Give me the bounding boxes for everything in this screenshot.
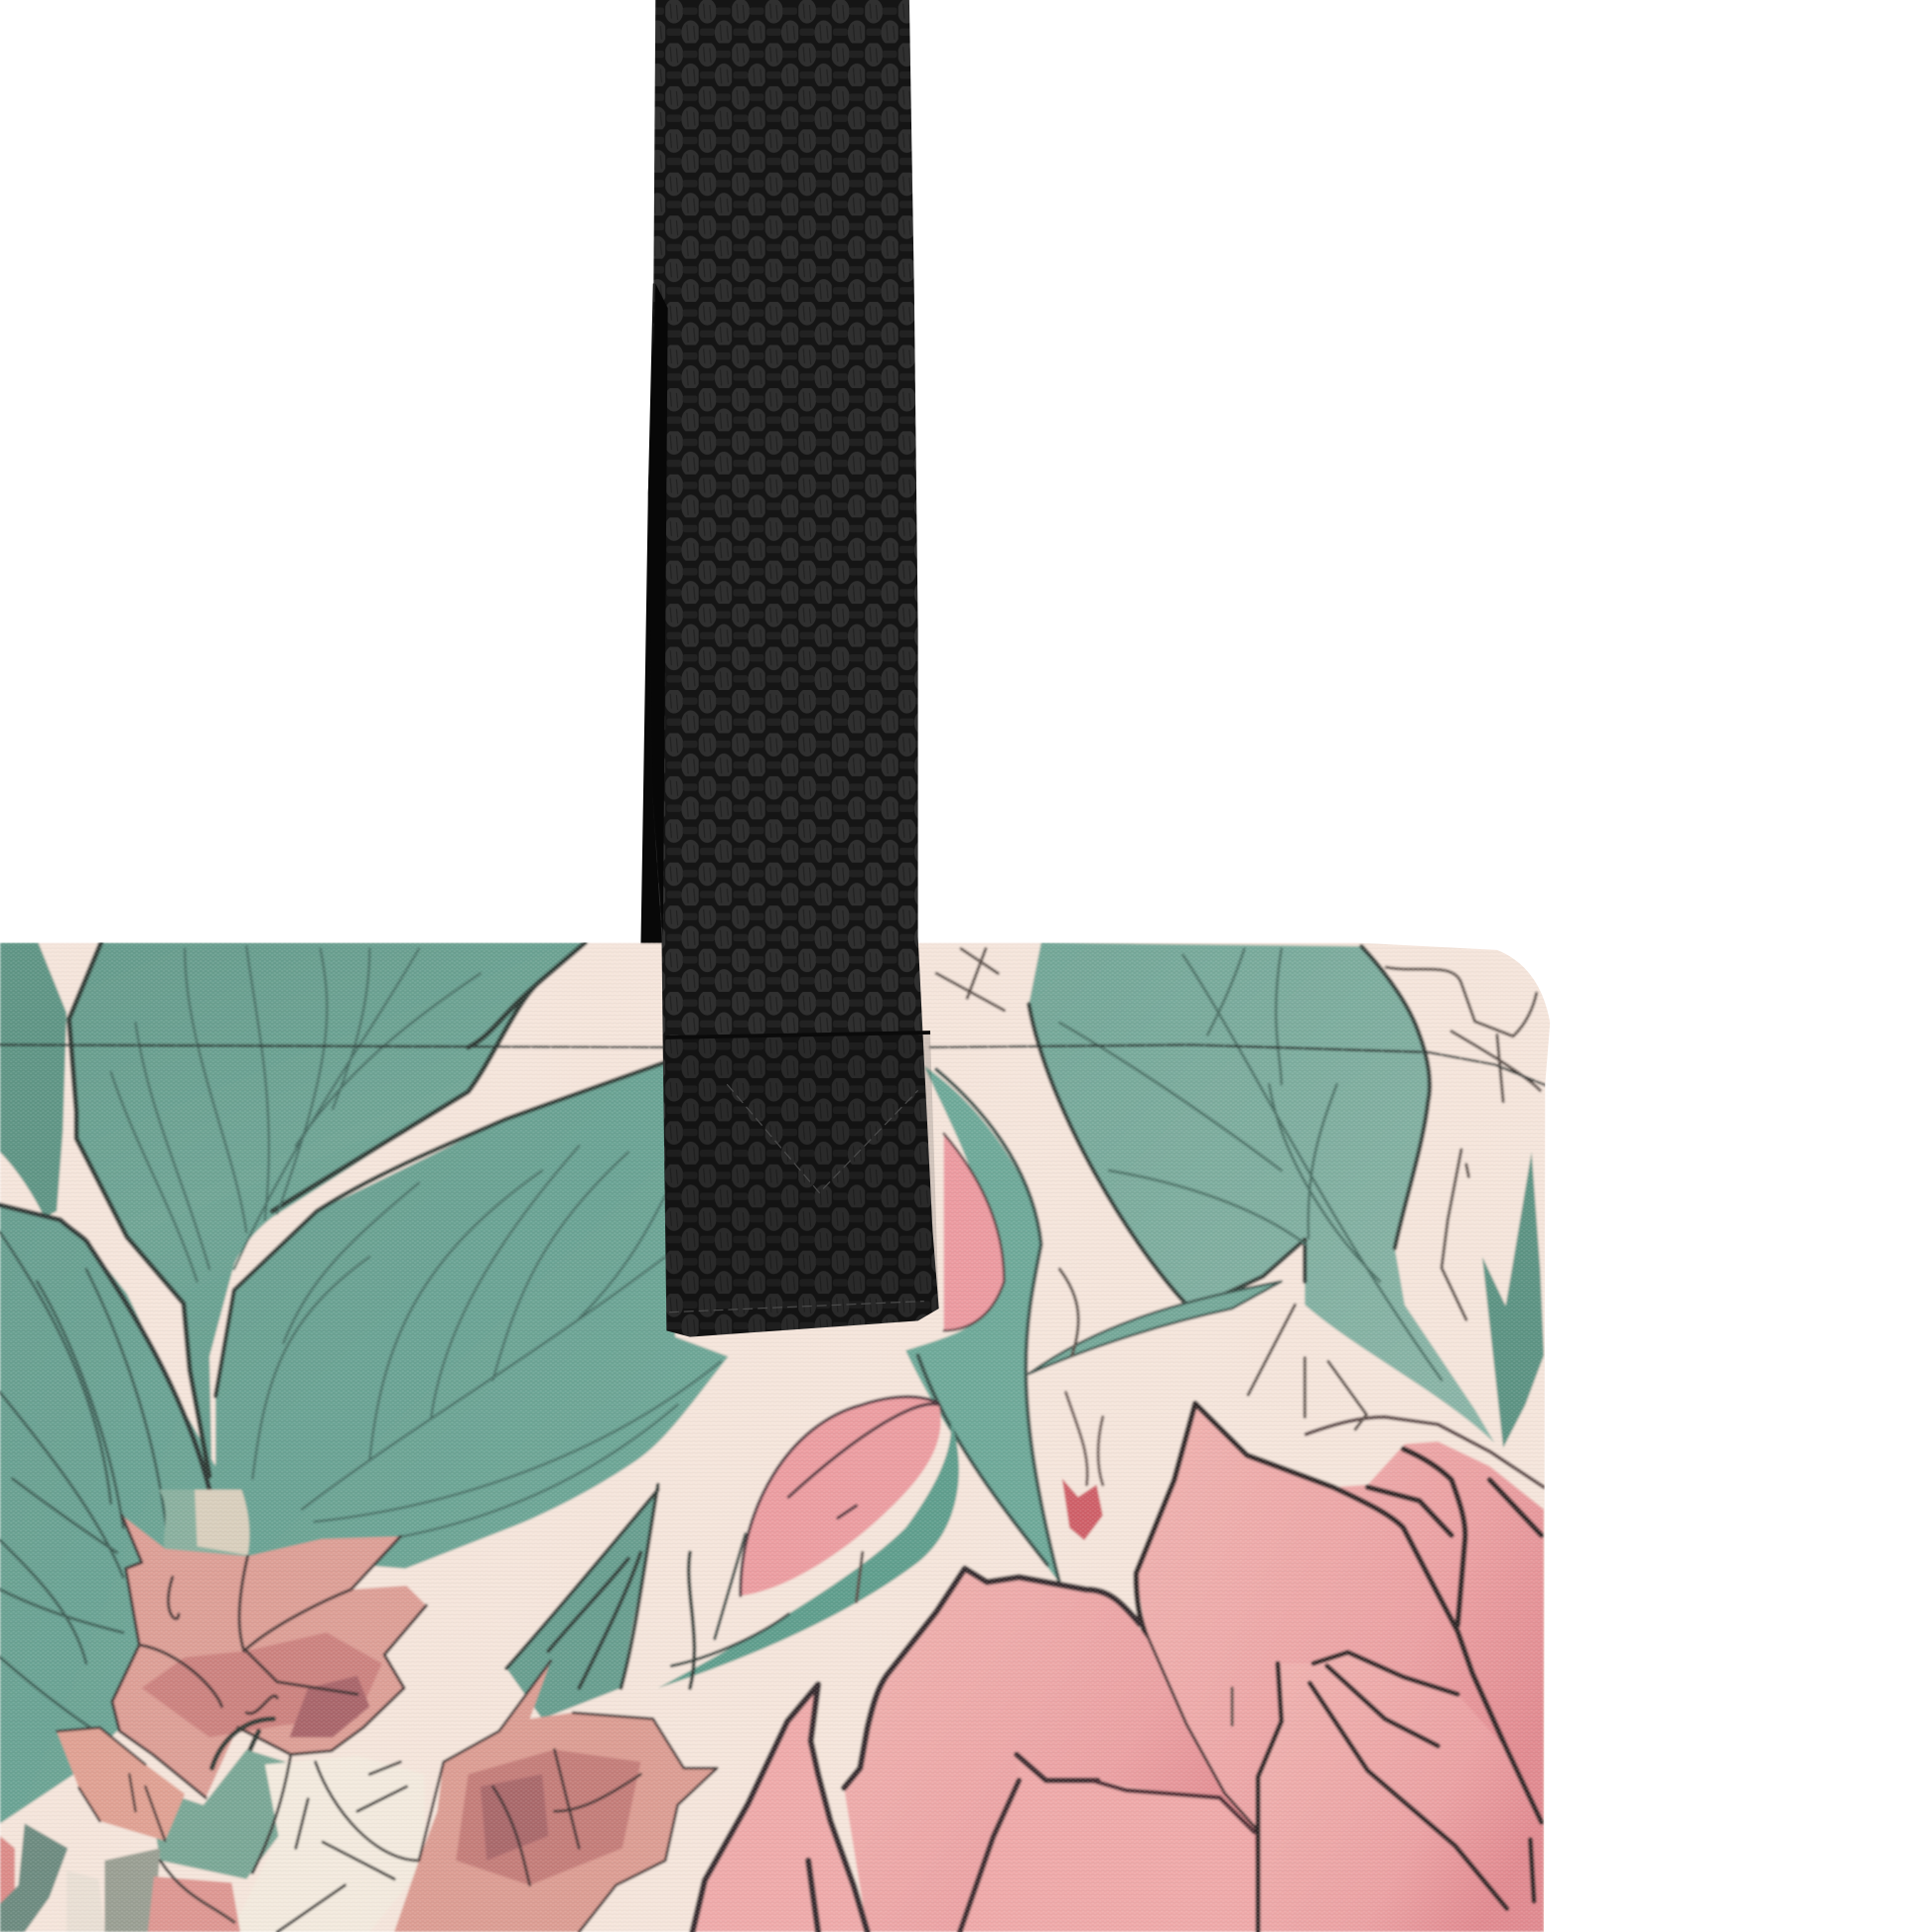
leaf: stems and strip right of strap — [905, 1066, 1059, 1584]
flower bud: right of strap — [944, 1134, 1004, 1330]
strap: upper length — [653, 0, 939, 1337]
leaf: left lower — [0, 1201, 217, 1825]
leaf: stem to right leaf — [1029, 1282, 1282, 1374]
petal: right front — [1258, 1652, 1544, 1932]
flower cluster: centre lower — [394, 1661, 717, 1932]
petal: left edge — [692, 1685, 868, 1932]
leaf: lower centre — [506, 1484, 694, 1719]
white blossom between clusters — [148, 1754, 425, 1932]
strap: hem fold — [665, 1033, 939, 1337]
pencil sketch marks on cream areas — [857, 949, 1540, 1725]
leaf: right edge sprig — [1482, 1152, 1544, 1448]
flower cluster: far left — [0, 1727, 185, 1932]
stitch line along hem — [0, 1044, 1547, 1085]
canvas texture overlay — [0, 942, 1553, 1932]
strap: dark selvedge — [648, 283, 668, 936]
leaf: centre large — [209, 1062, 728, 1569]
flower cluster: upper left — [112, 1489, 426, 1798]
strap back layer behind bag — [640, 283, 675, 949]
small rosebud sprig — [1062, 1392, 1103, 1540]
teal leaf under flowers — [148, 1749, 286, 1879]
petal: large pink centre — [844, 1569, 1269, 1932]
petal: large pink upper right — [1132, 1400, 1545, 1832]
leaf: far left top — [0, 942, 67, 1217]
leaf: right upper — [1029, 942, 1494, 1443]
flower bud: centre — [658, 1397, 959, 1688]
petal: front centre — [960, 1754, 1258, 1932]
black woven strap — [648, 0, 939, 1337]
leaf: top left large — [69, 942, 586, 1478]
panel: printed bag fabric — [0, 942, 1553, 1932]
